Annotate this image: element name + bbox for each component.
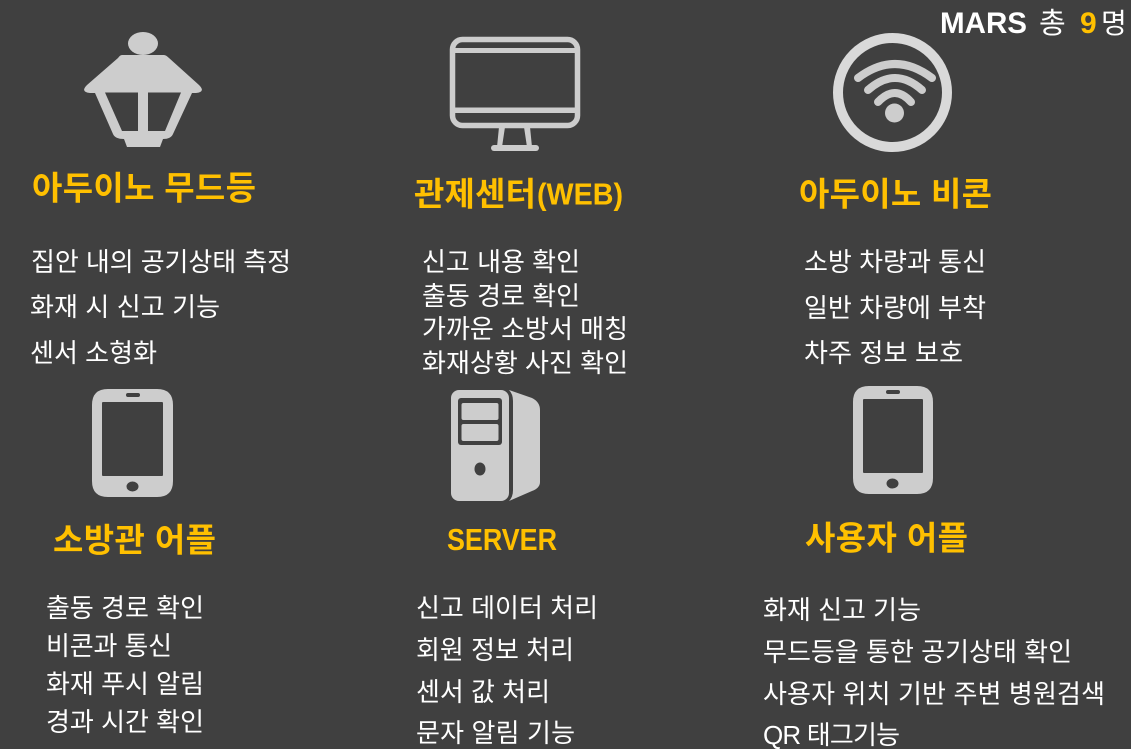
text block: 경과 시간 확인 [46,707,204,737]
text block: 가까운 소방서 매칭 [422,314,628,344]
text block: 출동 경로 확인 [422,281,580,311]
heading: 관제센터 [414,176,536,212]
text block: 무드등을 통한 공기상태 확인 [763,637,1072,667]
icon: smartphone [853,386,933,494]
panel: user app [763,386,1105,749]
panel: Arduino mood lamp [30,32,291,368]
text block [804,247,986,368]
heading: (WEB) [537,176,623,212]
panel: Arduino beacon [799,38,992,368]
title: MARS total 9 members: 9 [1080,7,1097,40]
text block: 집안 내의 공기상태 측정 [31,247,291,277]
title: MARS total 9 members: 명 [1101,8,1127,39]
text block: 비콘과 통신 [46,631,172,661]
heading: 사용자 어플 [805,520,968,556]
text block: 회원 정보 처리 [416,635,574,665]
heading: 아두이노 무드등 [32,170,256,206]
text block [416,593,598,748]
heading: SERVER [447,522,557,557]
panel: control center (WEB) [414,40,628,378]
icon: server tower [451,390,540,501]
panel: firefighter app [46,389,216,737]
icon: smartphone [92,389,173,497]
heading: 소방관 어플 [53,522,216,558]
text block: 화재 시 신고 기능 [30,292,220,322]
text block: 센서 소형화 [30,338,157,368]
heading [414,176,623,212]
icon: desktop monitor [452,40,578,151]
heading: 아두이노 비콘 [799,176,992,212]
text block: 문자 알림 기능 [416,718,575,748]
title: MARS total 9 members [940,7,1127,40]
text block: 일반 차량에 부착 [804,293,986,323]
text block: 출동 경로 확인 [46,593,204,623]
text block: 사용자 위치 기반 주변 병원검색 [763,679,1105,709]
text block: 신고 내용 확인 [422,247,580,277]
text block: 소방 차량과 통신 [804,247,986,277]
text block [763,595,1105,749]
text block [30,247,291,368]
title: MARS total 9 members: 총 [1039,8,1066,40]
text block: 차주 정보 보호 [804,338,963,368]
title: MARS total 9 members: MARS [940,7,1027,40]
icon: street lamp [84,32,202,147]
text block: 신고 데이터 처리 [416,593,598,623]
text block: 화재 신고 기능 [763,595,921,625]
icon: wifi circle [838,38,947,147]
text block [422,247,628,378]
text block [46,593,204,737]
text block: 화재 푸시 알림 [46,669,204,699]
text block: 센서 값 처리 [416,677,550,707]
panel: server [416,390,598,748]
text block: 화재상황 사진 확인 [422,348,628,378]
